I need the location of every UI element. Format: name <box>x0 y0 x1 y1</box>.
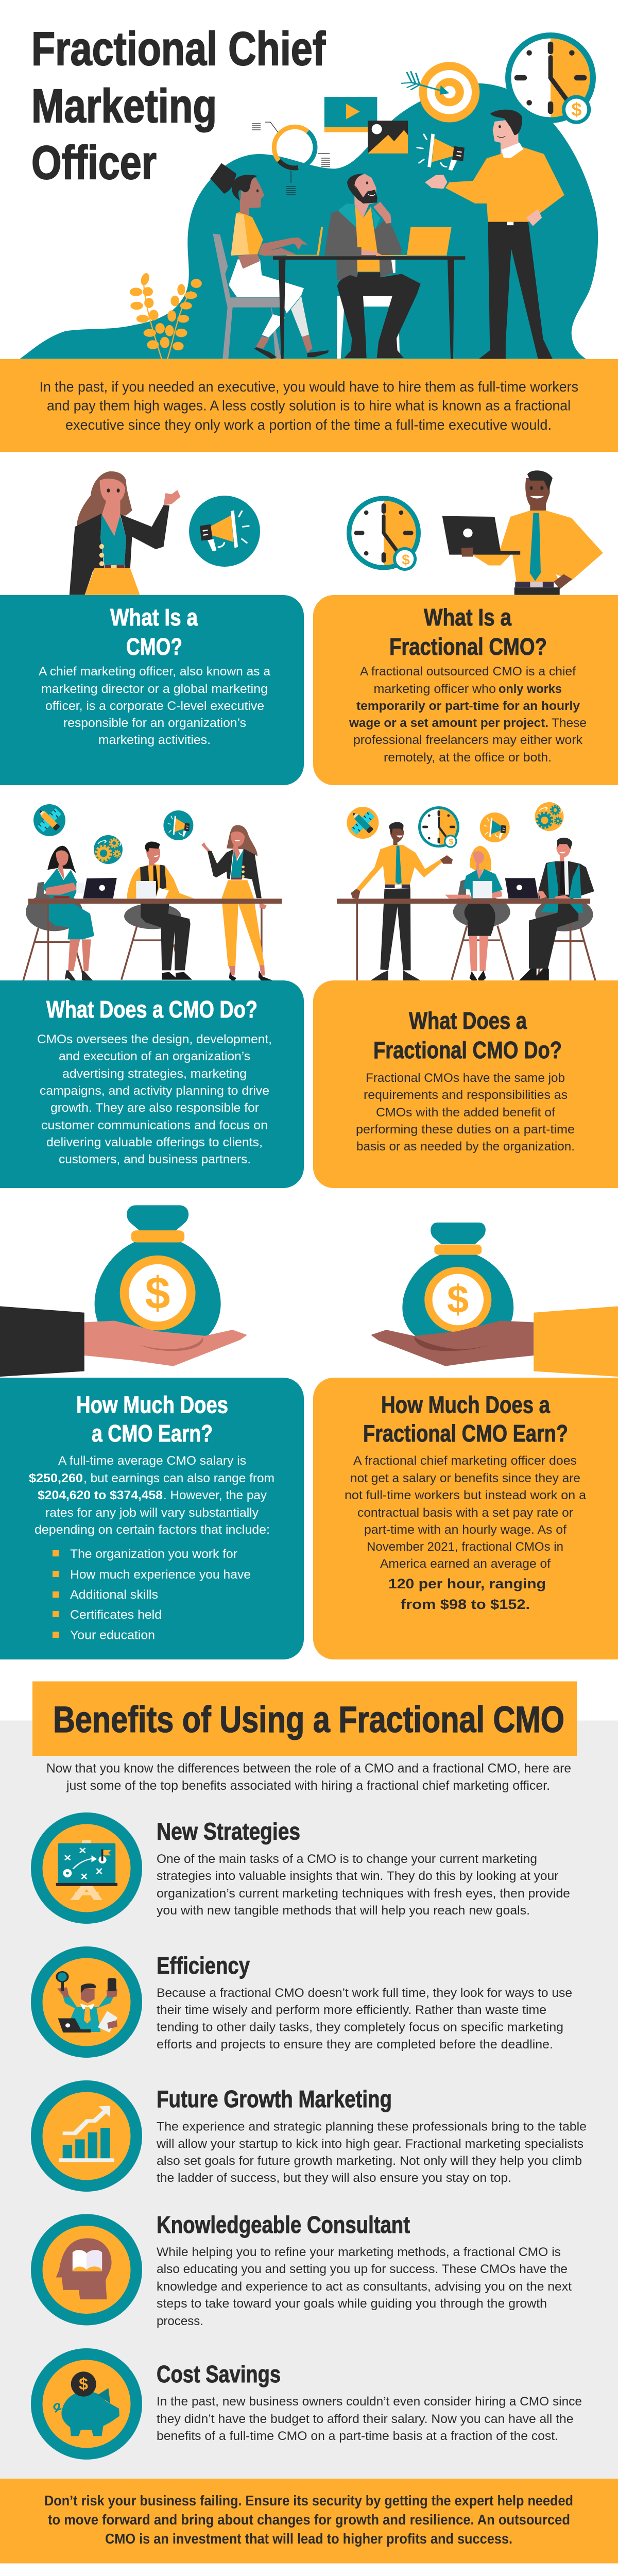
body text: their time wisely and perform more efficiently. Rather than waste time <box>157 2003 546 2017</box>
body text: customer communications and focus on <box>41 1118 268 1132</box>
body text: A fractional chief marketing officer does <box>353 1454 577 1468</box>
body text: wage or a set amount per project. <box>349 716 548 730</box>
body text: not full-time workers but instead work on a <box>345 1488 587 1502</box>
heading: What Does a CMO Do? <box>46 996 258 1023</box>
body text: knowledge and experience to act as consultants, advising you on the next <box>157 2280 572 2294</box>
body text: One of the main tasks of a CMO is to change your current marketing <box>157 1852 537 1866</box>
body text: from $98 to $152. <box>401 1597 530 1612</box>
body text: and execution of an organization’s <box>59 1049 250 1063</box>
body text: CMOs with the added benefit of <box>376 1106 555 1120</box>
bullet list: Certificates held <box>70 1608 162 1622</box>
bullet list: Your education <box>70 1628 155 1642</box>
dollar sign: $ <box>571 99 582 120</box>
illustration: woman with megaphone icon <box>70 471 181 595</box>
icon: piggy bank <box>31 2348 142 2460</box>
body text: depending on certain factors that include: <box>35 1523 270 1537</box>
icon: megaphone <box>163 810 193 840</box>
body text: remotely, at the office or both. <box>384 751 552 765</box>
icon: strategy board <box>31 1812 142 1924</box>
body text: rates for any job will vary substantially <box>45 1506 259 1520</box>
icon: clock with dollar <box>347 496 421 571</box>
intro text: In the past, if you needed an executive, you would have to hire them as full-time workers <box>39 379 578 395</box>
body text: delivering valuable offerings to clients, <box>46 1136 263 1149</box>
body text: organization’s current marketing techniques with fresh eyes, then provide <box>157 1887 570 1901</box>
icon: target with arrow <box>401 62 479 123</box>
body text: steps to take toward your goals while guiding you through the growth <box>157 2297 547 2311</box>
icon: plant <box>130 273 202 359</box>
body text <box>345 1454 587 1612</box>
illustration: man with laptop and clock <box>442 470 603 595</box>
heading <box>389 604 547 660</box>
benefits section background <box>0 1721 618 2479</box>
body text <box>39 665 271 747</box>
body text <box>349 665 587 765</box>
body text: performing these duties on a part-time <box>356 1123 575 1137</box>
body text: professional freelancers may either work <box>353 733 583 747</box>
body text: A chief marketing officer, also known as a <box>39 665 271 679</box>
dollar sign: $ <box>79 2375 88 2393</box>
body text: A full-time average CMO salary is <box>58 1454 246 1468</box>
intro band <box>0 359 618 452</box>
title: Officer <box>31 137 157 189</box>
intro text: executive since they only work a portion of the time a full-time executive would. <box>65 417 552 433</box>
heading: How Much Does <box>76 1391 228 1418</box>
body text: officer, is a corporate C-level executive <box>45 699 264 713</box>
body text: the ladder of success, but they will also ensure you stay on top. <box>157 2171 511 2185</box>
title: Fractional Chief <box>31 23 325 75</box>
body text: tending to other daily tasks, they completely focus on specific marketing <box>157 2021 563 2034</box>
panel: What Does a Fractional CMO Do <box>313 980 618 1188</box>
body text: advertising strategies, marketing <box>62 1067 247 1081</box>
illustration: fractional CMO team at desk <box>337 822 595 983</box>
dollar sign: $ <box>447 1278 469 1321</box>
body text: In the past, new business owners couldn’t even consider hiring a CMO since <box>157 2395 582 2409</box>
body text: marketing officer who <box>374 682 496 696</box>
icon: pencil and ruler <box>33 804 65 836</box>
body text: The experience and strategic planning these professionals bring to the table <box>157 2120 587 2134</box>
body text <box>356 1071 575 1154</box>
heading: Fractional CMO? <box>389 633 547 660</box>
illustration: hand holding money bag (fractional CMO) <box>371 1223 618 1377</box>
body text: part-time with an hourly wage. As of <box>364 1523 566 1537</box>
body text: efforts and projects to ensure they are completed before the deadline. <box>157 2038 553 2052</box>
icon: clock with dollar <box>418 806 459 848</box>
body text: $250,260 <box>29 1471 83 1485</box>
header: hero illustration and title <box>20 23 598 359</box>
dollar sign: $ <box>145 1267 170 1318</box>
bullet list <box>53 1547 251 1642</box>
body text: contractual basis with a set pay rate or <box>357 1506 573 1520</box>
benefit: New Strategies <box>31 1812 570 1924</box>
bullet list: The organization you work for <box>70 1547 237 1561</box>
body text: they didn’t have the budget to afford their salary. Now you can have all the <box>157 2412 574 2426</box>
body text: customers, and business partners. <box>59 1153 251 1166</box>
intro text <box>39 379 578 433</box>
body text: $204,620 to $374,458 <box>38 1488 163 1502</box>
heading: Knowledgeable Consultant <box>157 2211 410 2238</box>
benefits intro <box>46 1761 571 1793</box>
icon: teal megaphone circle <box>189 496 260 567</box>
body text: growth. They are also responsible for <box>50 1101 259 1115</box>
body text <box>37 1032 272 1166</box>
heading <box>110 604 198 660</box>
benefit: Efficiency <box>31 1946 572 2058</box>
heading: a CMO Earn? <box>92 1420 213 1447</box>
heading: Cost Savings <box>157 2361 281 2387</box>
body text: also educating you and setting you up for success. These CMOs have the <box>157 2262 568 2276</box>
heading: CMO? <box>126 633 182 660</box>
heading: What Is a <box>110 604 198 631</box>
heading: What Is a <box>424 604 511 631</box>
heading: Efficiency <box>157 1952 250 1979</box>
body text: campaigns, and activity planning to drive <box>40 1084 269 1098</box>
body text: not get a salary or benefits since they are <box>350 1471 580 1485</box>
heading <box>373 1007 562 1063</box>
body text <box>156 2120 587 2185</box>
bullet list: How much experience you have <box>70 1568 251 1582</box>
icon: pencil and ruler <box>347 807 379 839</box>
heading: Fractional CMO Earn? <box>363 1420 568 1447</box>
heading: Future Growth Marketing <box>157 2086 392 2112</box>
intro text: and pay them high wages. A less costly solution is to hire what is known as a fractional <box>47 398 571 413</box>
body text: only works <box>499 682 562 696</box>
illustration: hand holding money bag (CMO) <box>0 1205 247 1377</box>
body text: Because a fractional CMO doesn’t work full time, they look for ways to use <box>157 1986 572 2000</box>
dollar sign: $ <box>449 838 454 846</box>
icon: gears <box>94 835 123 864</box>
call to action band: to move forward and bring about changes for growth and resilience. An outsourced <box>48 2512 570 2528</box>
body text: 120 per hour, ranging <box>388 1576 546 1591</box>
section heading: Benefits <box>32 1682 577 1756</box>
heading: What Does a <box>409 1007 527 1034</box>
body text: Fractional CMOs have the same job <box>366 1071 565 1085</box>
benefit: Future Growth Marketing <box>31 2080 587 2192</box>
body text: marketing activities. <box>98 733 211 747</box>
benefit: Knowledgeable Consultant <box>31 2211 572 2328</box>
body text: basis or as needed by the organization. <box>356 1140 575 1154</box>
icon: head with book <box>31 2214 142 2326</box>
panel: What Does a CMO Do <box>0 980 304 1188</box>
body text: . However, the pay <box>163 1488 267 1502</box>
body text: benefits of a full-time CMO on a part-time basis at a fraction of the cost. <box>157 2429 558 2443</box>
body text: While helping you to refine your marketing methods, a fractional CMO is <box>157 2245 561 2259</box>
icon: megaphone <box>417 133 465 171</box>
body text: America earned an average of <box>380 1557 551 1571</box>
heading: How Much Does a <box>381 1391 550 1418</box>
panel: How Much Does a Fractional CMO Earn <box>313 1378 618 1659</box>
icon: growth chart <box>31 2080 142 2192</box>
body text: will allow your startup to kick into high gear. Fractional marketing specialists <box>156 2137 583 2151</box>
heading <box>363 1391 568 1447</box>
call to action band: Don’t risk your business failing. Ensure its security by getting the expert help needed <box>44 2493 573 2509</box>
panel: How Much Does a CMO Earn <box>0 1378 304 1659</box>
body text <box>157 2245 572 2328</box>
body text: marketing director or a global marketing <box>41 682 268 696</box>
panel: What Is a CMO <box>0 595 304 785</box>
body text <box>29 1454 274 1537</box>
icon: gears <box>535 802 563 831</box>
illustration: CMO team at desk <box>23 825 282 982</box>
body text <box>157 2395 582 2443</box>
body text: A fractional outsourced CMO is a chief <box>360 665 576 679</box>
body text: responsible for an organization’s <box>63 716 246 730</box>
icon: video player <box>324 97 377 132</box>
hero illustration: teal blob background <box>20 83 598 359</box>
icon: donut chart <box>252 122 330 195</box>
bullet list: Additional skills <box>70 1588 158 1602</box>
call to action band: CMO is an investment that will lead to higher profits and success. <box>105 2531 512 2547</box>
body text: also set goals for future growth marketing. Not only will they help you climb <box>157 2154 582 2168</box>
call to action band <box>0 2479 618 2564</box>
body text: process. <box>157 2314 203 2328</box>
benefits intro: just some of the top benefits associated with hiring a fractional chief marketing officer. <box>66 1778 550 1793</box>
title <box>31 23 325 189</box>
body text: November 2021, fractional CMOs in <box>367 1540 563 1554</box>
icon: multitasking person <box>31 1946 142 2058</box>
icon: megaphone <box>480 812 510 842</box>
person: standing man in orange sweater <box>425 110 564 359</box>
body text <box>157 1852 570 1918</box>
heading: New Strategies <box>157 1818 300 1845</box>
body text: CMOs oversees the design, development, <box>37 1032 272 1046</box>
body text: requirements and responsibilities as <box>364 1088 568 1102</box>
icon: picture frame <box>368 121 408 154</box>
body text: you with new tangible methods that will help you reach new goals. <box>157 1904 530 1918</box>
body text: strategies into valuable insights that win. They do this by looking at your <box>157 1869 558 1883</box>
body text: temporarily or part-time for an hourly <box>356 699 580 713</box>
body text: , but earnings can also range from <box>83 1471 274 1485</box>
panel: What Is a Fractional CMO <box>313 595 618 785</box>
heading <box>76 1391 228 1447</box>
dollar sign: $ <box>402 552 410 568</box>
benefits intro: Now that you know the differences between the role of a CMO and a fractional CMO, here are <box>46 1761 571 1775</box>
person: seated woman, bearded man and desk <box>210 163 465 359</box>
benefit: Cost Savings <box>31 2348 582 2460</box>
title: Marketing <box>31 80 217 132</box>
heading: Fractional CMO Do? <box>373 1037 562 1063</box>
body text: These <box>552 716 587 730</box>
body text <box>157 1986 572 2052</box>
icon: clock with dollar <box>505 32 596 124</box>
